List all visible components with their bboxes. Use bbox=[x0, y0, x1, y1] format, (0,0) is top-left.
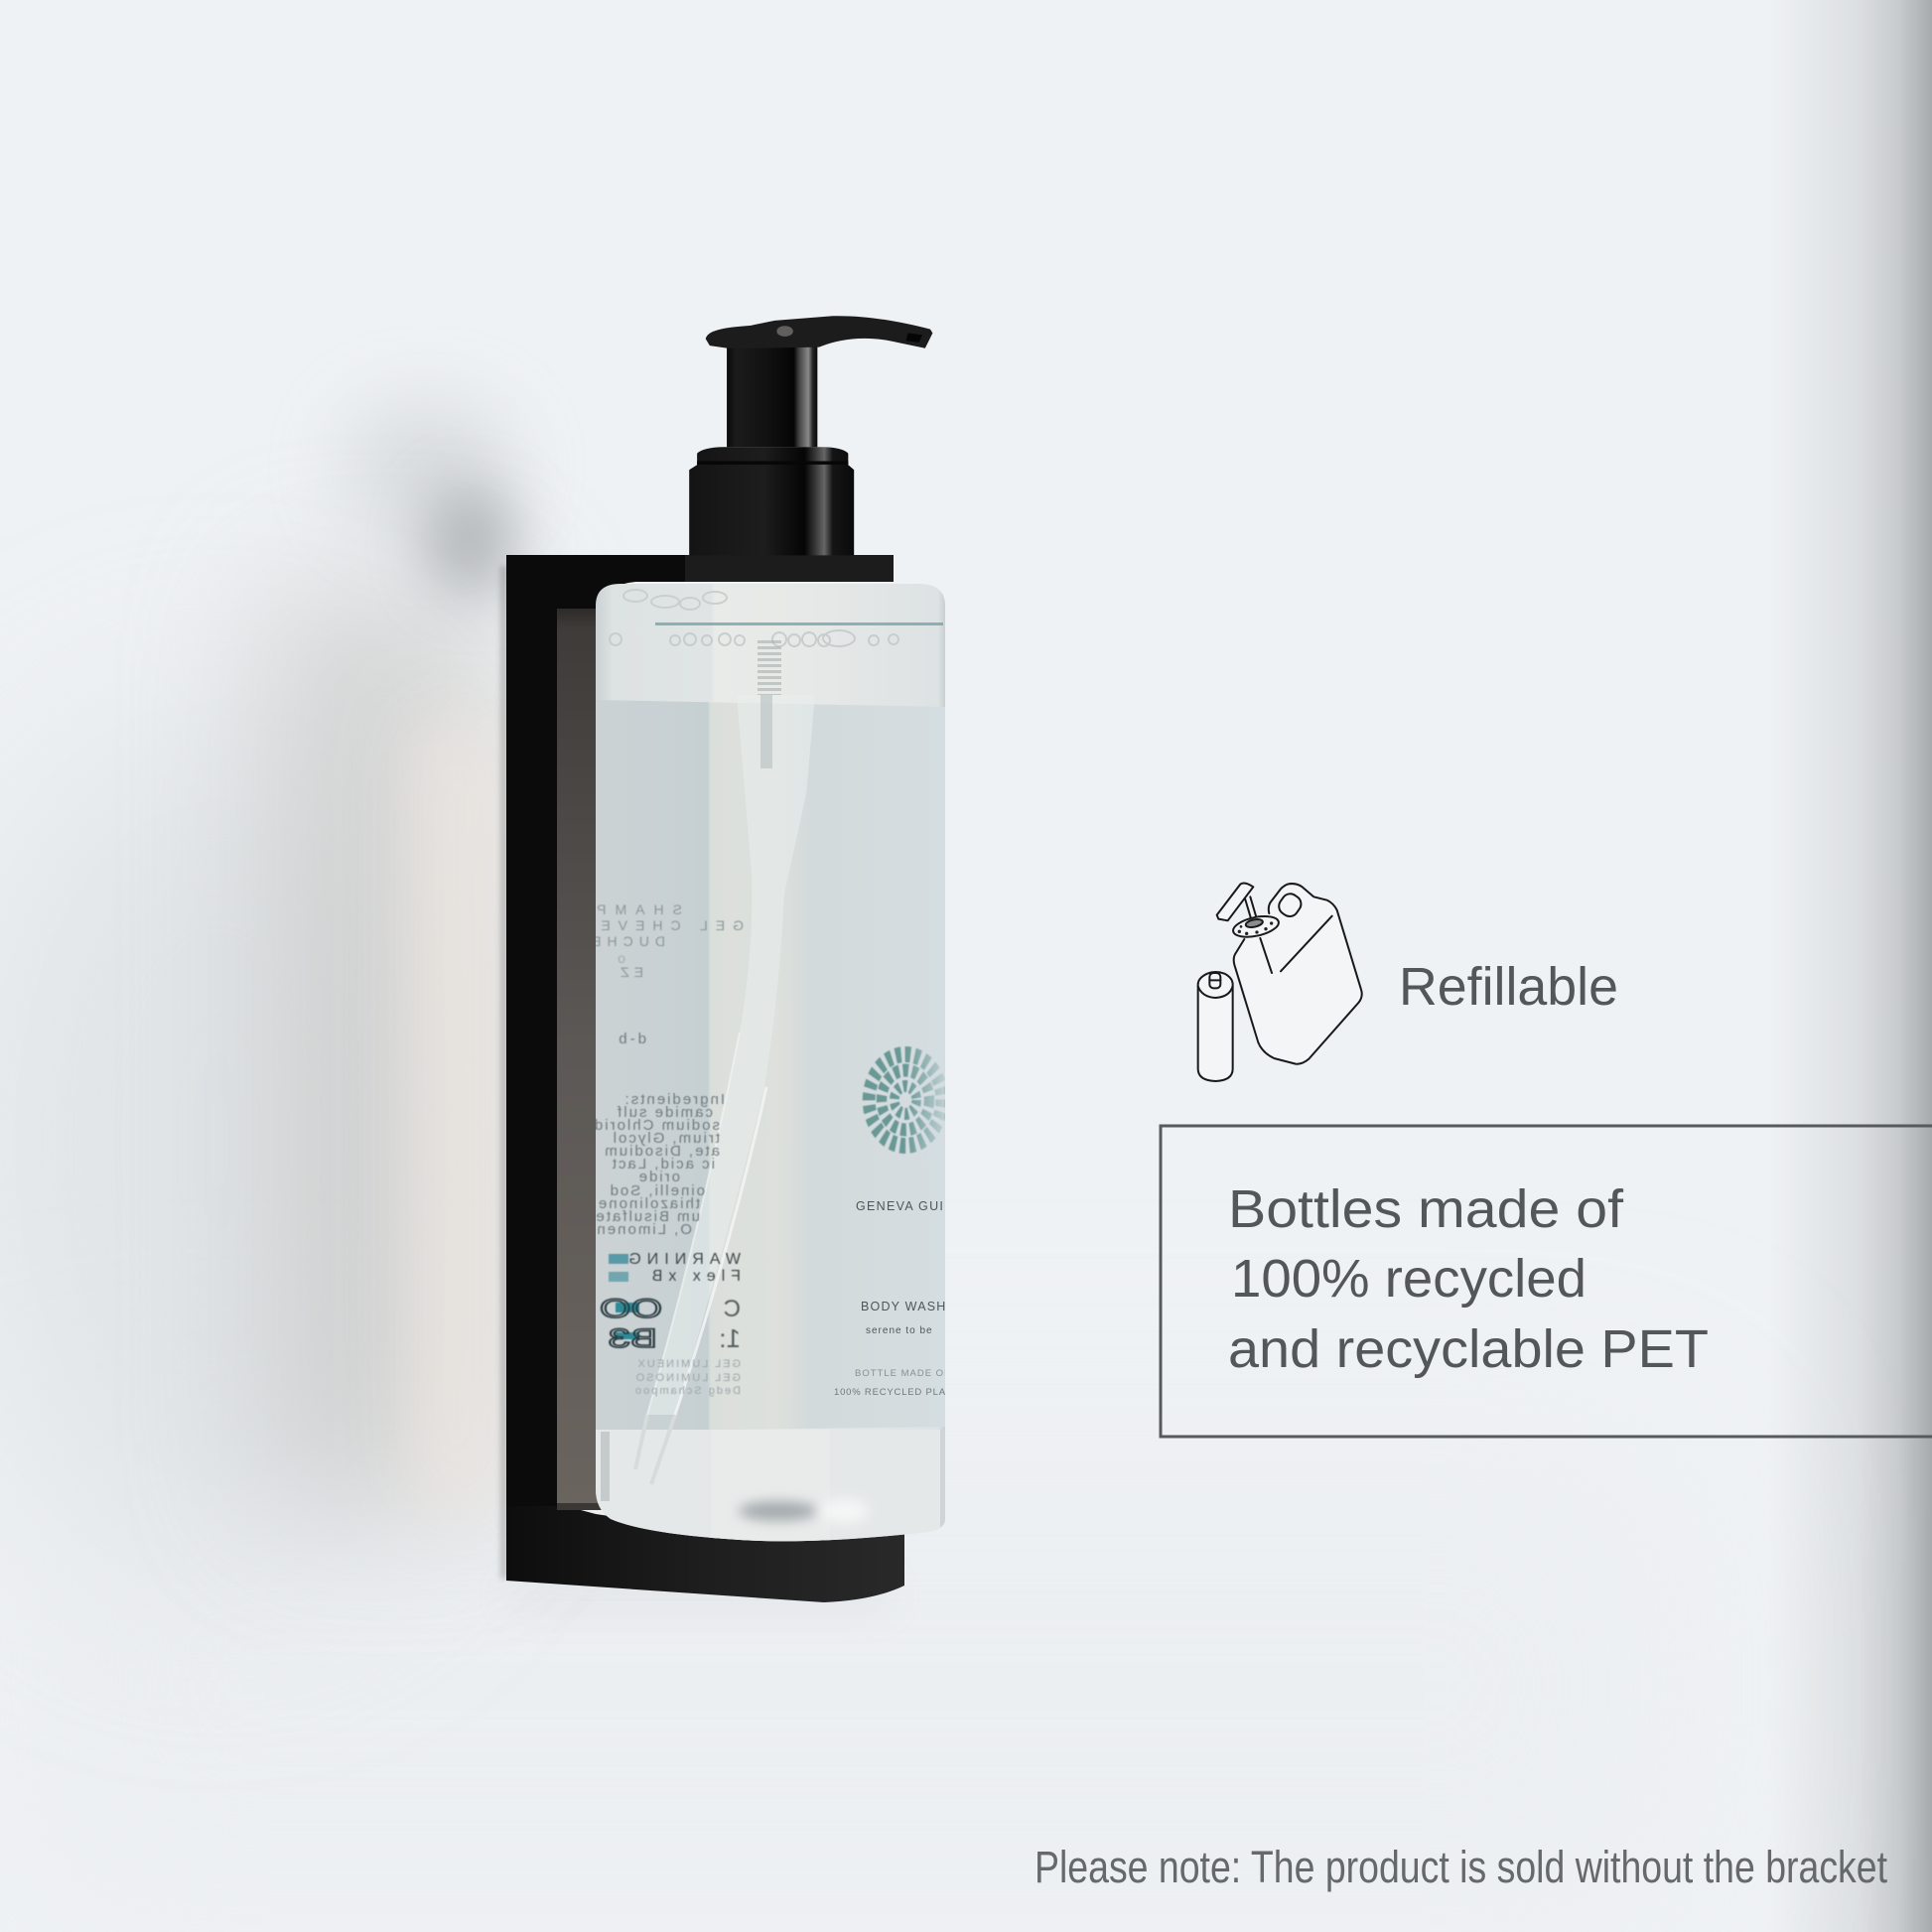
front label text: BODY WASH bbox=[861, 1300, 947, 1313]
callout text: and recyclable PET bbox=[1228, 1319, 1709, 1379]
mirrored back label text: OO bbox=[600, 1294, 662, 1323]
mirrored back label text: 1: bbox=[719, 1323, 741, 1353]
mirrored back label text: oinelli, Sod bbox=[609, 1182, 705, 1199]
front label text: 100% RECYCLED PLASTIC bbox=[834, 1387, 971, 1398]
pump dip tube bbox=[647, 640, 815, 1415]
mirrored back label text: Flex xB bbox=[646, 1268, 741, 1285]
bottle base bbox=[596, 1415, 946, 1549]
mirrored back label text: GEL LUMINOSO bbox=[634, 1372, 741, 1384]
wall bracket bbox=[506, 555, 904, 1602]
mirrored back label text: um Bisulfate bbox=[594, 1208, 700, 1225]
mirrored back label text: B3 bbox=[608, 1323, 657, 1353]
bracket base bbox=[506, 1506, 904, 1602]
front label logo bbox=[869, 1042, 945, 1162]
mirrored back label text: sodium Chloride bbox=[583, 1117, 720, 1134]
callout text: 100% recycled bbox=[1231, 1249, 1587, 1309]
mirrored back label text: oride bbox=[637, 1169, 680, 1185]
callout text: Bottles made of bbox=[1228, 1179, 1624, 1239]
mirrored back label text: o bbox=[612, 950, 625, 966]
pump head with spout bbox=[706, 316, 932, 348]
icon: canister bbox=[1234, 884, 1362, 1064]
label bbox=[596, 700, 945, 1432]
bracket back column and top arm bbox=[506, 555, 894, 1509]
bottle body bbox=[596, 584, 945, 1547]
mirrored back label text: ate, Disodium bbox=[603, 1143, 720, 1160]
bracket inner panel bbox=[557, 582, 599, 1510]
mirrored back label text: camide sulf bbox=[616, 1104, 713, 1121]
mirrored back label text: Dedg Schampoo bbox=[633, 1385, 741, 1397]
mirrored back label text: trium, Glycol bbox=[612, 1130, 720, 1147]
front label text: GENEVA GUILD bbox=[856, 1199, 963, 1213]
mirrored back label text bbox=[596, 904, 744, 1397]
mirrored back label text: WARNING bbox=[622, 1251, 741, 1268]
mirrored back label text: SHAMPOO bbox=[548, 901, 682, 917]
pump stem bbox=[727, 343, 817, 447]
mirrored back label text: EZ bbox=[616, 964, 643, 980]
front label text bbox=[834, 1201, 945, 1395]
label: Refillable: Refillable bbox=[1399, 957, 1618, 1017]
mirrored back label text: GEL LUMINEUX bbox=[635, 1358, 741, 1370]
mirrored back label text: C bbox=[724, 1296, 741, 1322]
mirrored back label text: d-b bbox=[616, 1031, 646, 1047]
mirrored back label text: O, Limonene bbox=[585, 1221, 692, 1238]
refill icon: jug, pump and bottle bbox=[1198, 883, 1362, 1081]
front label text: BOTTLE MADE OF bbox=[855, 1368, 951, 1379]
soap pump bbox=[689, 316, 932, 555]
bottle bbox=[596, 584, 945, 1541]
liquid line and bubbles bbox=[610, 590, 943, 646]
mirrored back label text: Ingredients: bbox=[623, 1091, 725, 1108]
pump collar bbox=[689, 447, 854, 555]
mirrored back label text: GEL CHEVEUX bbox=[558, 917, 744, 933]
mirrored back label text: DUCHE bbox=[586, 933, 665, 949]
front label text: serene to be bbox=[866, 1325, 933, 1336]
icon: pump bbox=[1217, 883, 1281, 940]
icon: small bottle bbox=[1198, 972, 1233, 1081]
mirrored back label text: ic acid, Lact bbox=[611, 1156, 715, 1173]
mirrored back label text: thiazolinone bbox=[597, 1195, 700, 1212]
callout text bbox=[1228, 1179, 1709, 1379]
callout box bbox=[1161, 1126, 1932, 1437]
